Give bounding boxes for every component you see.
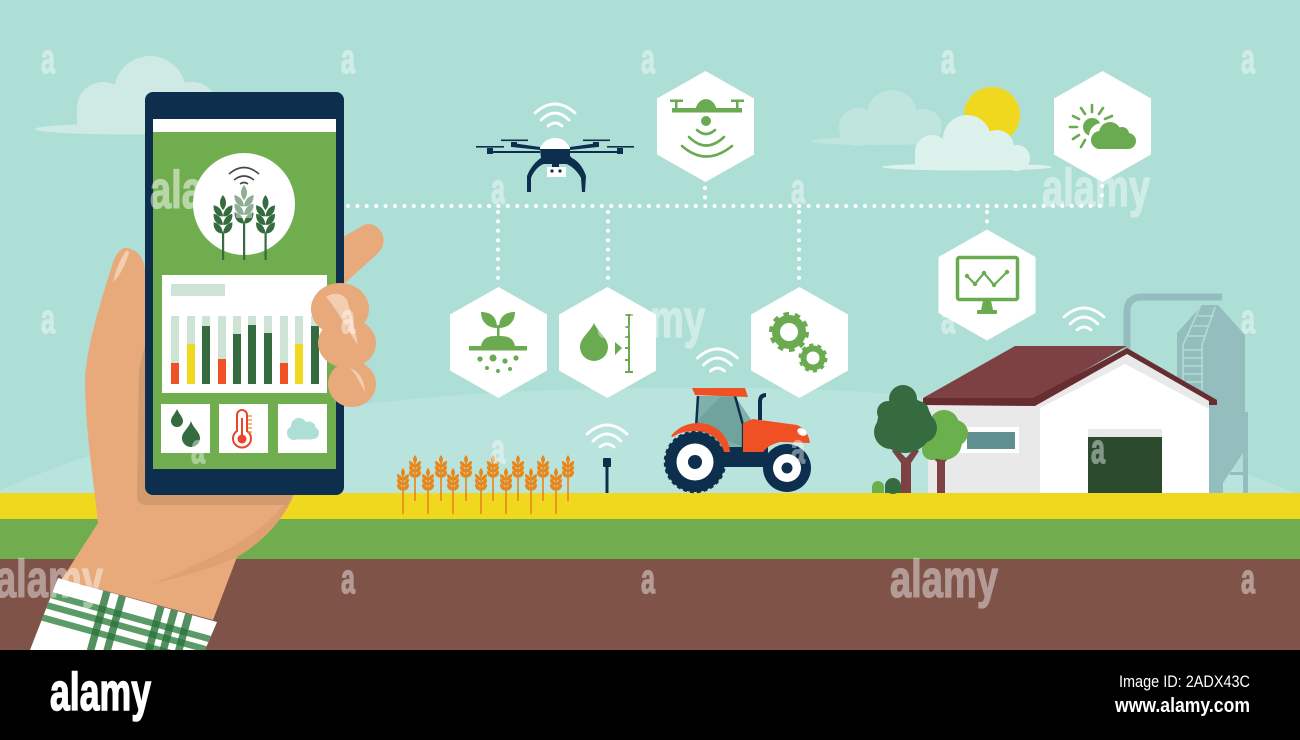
watermark tiles: a [491,165,505,212]
roof [923,346,1127,400]
hexagon: water level [559,287,656,398]
drone dome [540,138,570,149]
screen top bar [153,119,336,132]
phone shadow on hand [137,340,295,505]
smartphone [145,92,344,495]
icon: sensor wifi [587,425,627,447]
phone screen [153,119,336,469]
green field band [0,519,1300,559]
yellow crop band [0,493,1300,519]
silo pipe [1127,297,1222,350]
icon: barn wifi [1064,308,1104,330]
soil band [0,559,1300,650]
barn side wall [928,400,1040,493]
watermark tiles: a [491,425,505,472]
tractor [664,388,811,492]
front wheel [763,444,811,492]
hexagon: weather [1054,71,1151,182]
watermark tiles: a [941,35,955,82]
watermark tiles: a [641,555,655,602]
wrist shading [150,497,293,584]
chassis [720,447,768,467]
watermark tiles: a [41,35,55,82]
watermark tiles: a [1091,425,1105,472]
watermark tiles: a [1241,35,1255,82]
cloud: left [35,56,225,134]
tile: thermometer [219,404,268,453]
fingers over phone [311,283,376,407]
watermark tiles: a [791,425,805,472]
black footer band [0,650,1300,740]
hexagon: gears [751,287,848,398]
watermark tiles: a [341,555,355,602]
distant hills [0,388,1300,500]
footer url: www.alamy.com [1114,695,1250,717]
rear wheel [664,432,726,492]
tile: water drops [161,404,210,453]
drone camera [547,167,566,177]
drone [476,104,634,192]
thumbnail [113,250,129,282]
bushes [872,478,901,494]
tile: cloud [278,404,327,453]
bar chart panel [162,275,327,393]
wheat field [397,455,574,514]
footer logo: alamy [50,663,151,722]
watermark tiles: a [341,35,355,82]
watermark tiles: a [191,425,205,472]
tree: light [922,410,968,493]
silo ladder [1183,307,1215,390]
drone frame [476,140,634,192]
silo leg [1230,412,1248,493]
field sensor [587,425,627,493]
hood [743,419,810,452]
watermark tiles: a [1241,555,1255,602]
crop badge [193,153,295,260]
watermark tiles: alamy [597,290,705,349]
icon: tractor wifi [698,349,738,371]
upper finger [335,224,384,283]
silo [1127,297,1248,493]
barn [923,346,1217,493]
icon: drone wifi [535,104,575,126]
watermark tiles [0,35,1255,609]
hexagon: drone monitoring [657,71,754,182]
cloud: back right [810,90,944,146]
watermark tiles: a [641,35,655,82]
hexagon: data monitor [938,230,1036,340]
phone body [145,92,344,495]
barn window [960,427,1019,453]
hand holding phone [62,224,384,620]
barn door [1088,429,1162,493]
exhaust [760,395,766,420]
watermark on screen: alamy [150,161,258,220]
cloud: front right [882,115,1052,171]
cab roof [692,388,748,397]
watermark tiles: alamy [1042,159,1150,218]
dotted network lines [348,186,1105,283]
watermark tiles: a [1241,295,1255,342]
gable wall [1035,353,1209,493]
tree: dark [874,385,937,493]
silo body [1177,305,1245,493]
sun [964,87,1020,143]
shirt cuff [30,578,217,650]
watermark tiles: a [791,165,805,212]
footer image id: Image ID: 2ADX43C [1119,672,1250,691]
hexagon: soil and seedling [450,287,547,398]
hand base [62,248,300,620]
rear fender [671,423,730,452]
watermark tiles: a [341,295,355,342]
watermark tiles: a [941,295,955,342]
watermark tiles: a [41,295,55,342]
cab [697,396,752,452]
sensor post [603,458,611,493]
watermark tiles: alamy [890,550,998,609]
